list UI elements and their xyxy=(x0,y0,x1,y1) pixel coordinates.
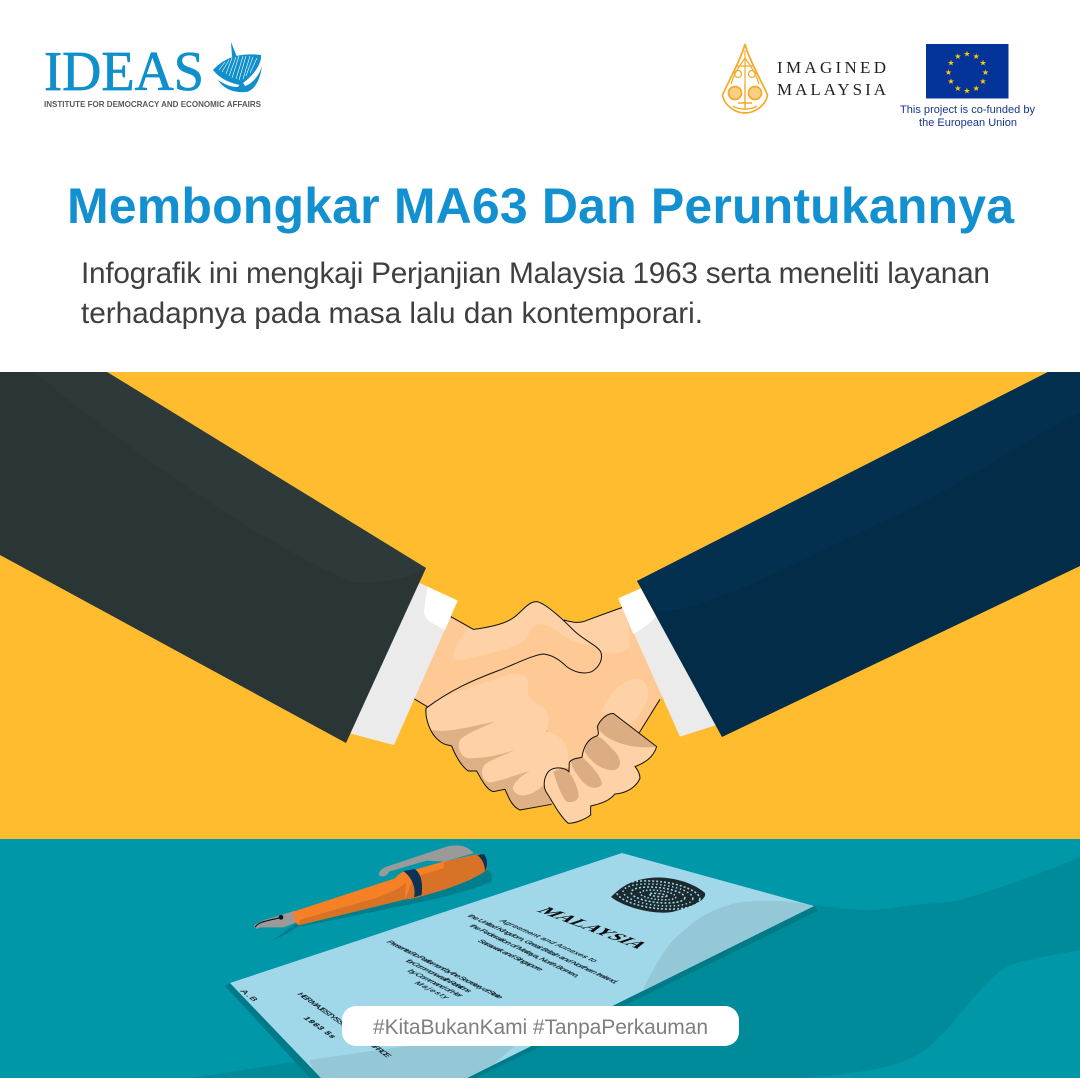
title: Membongkar MA63 Dan Peruntukannya xyxy=(67,178,1015,234)
logo: Imagined Malaysia xyxy=(722,44,887,113)
document body text: the Federation of Malaya, North Borneo, xyxy=(467,924,583,978)
EU flag: ★ xyxy=(973,52,980,61)
back hand and forearms xyxy=(403,602,668,770)
document body text: 1963 5s xyxy=(301,1016,339,1039)
logo wordmark line 2: MALAYSIA xyxy=(777,80,887,99)
subtitle: Infografik ini mengkaji Perjanjian Malaysia 1963 serta meneliti layanan xyxy=(81,257,990,290)
fist shadow xyxy=(426,708,568,810)
document body text: Sarawak and Singapore xyxy=(475,939,547,972)
pen barrel lower shade xyxy=(299,882,406,925)
document body text: A.B xyxy=(238,989,261,1002)
EU flag: ★ xyxy=(947,59,955,68)
document body text: for Commonwealth Relations xyxy=(403,959,474,993)
EU flag: ★ xyxy=(954,84,961,93)
front fingers xyxy=(544,713,657,823)
pen nib xyxy=(254,911,297,929)
subtitle xyxy=(81,257,990,330)
pen clip xyxy=(379,845,473,876)
EU flag: ★ xyxy=(973,84,980,93)
left shirt cuff xyxy=(343,580,458,745)
subtitle: terhadapnya pada masa lalu dan kontemporari. xyxy=(81,297,703,330)
logo wordmark line 1: IMAGINED xyxy=(777,58,886,77)
logo tagline: INSTITUTE FOR DEMOCRACY AND ECONOMIC AFFAIRS xyxy=(44,100,262,109)
panel: yellow handshake background xyxy=(0,372,1080,839)
document body text: by Command of Her xyxy=(405,969,466,998)
EU flag xyxy=(926,44,1008,98)
document shadow xyxy=(225,906,818,1078)
EU flag: ★ xyxy=(947,77,955,86)
EU flag: ★ xyxy=(954,52,961,61)
icon: IDEAS bird xyxy=(213,42,262,92)
document body text: the United Kingdom, Great Britain and Northern Ireland, xyxy=(465,914,622,984)
right suit sleeve xyxy=(637,372,1080,737)
document heading: MALAYSIA xyxy=(531,906,654,951)
fist highlight xyxy=(426,674,568,795)
finger outline xyxy=(544,713,657,823)
illustration: handshake xyxy=(403,602,668,823)
document body text: Presented to Parliament by the Secretary of State xyxy=(384,940,506,999)
panel: teal table background xyxy=(0,839,1080,1078)
pen barrel xyxy=(293,854,487,925)
logo: EU flag and co-funding note xyxy=(900,44,1036,129)
document body text: Agreement and Annexes to xyxy=(497,919,601,963)
EU flag: ★ xyxy=(979,77,987,86)
document coat of arms xyxy=(611,877,705,913)
pen bands xyxy=(403,854,487,897)
illustration: document xyxy=(225,853,820,1080)
EU flag: ★ xyxy=(963,86,971,96)
icon: wayang leaf emblem xyxy=(722,44,768,113)
table shading wave xyxy=(190,857,1080,1078)
skin highlight: lower right xyxy=(602,678,648,727)
hashtags: #KitaBukanKami #TanpaPerkauman xyxy=(373,1016,708,1039)
document body text: HER MAJESTY'S STATIONERY OFFICE xyxy=(295,992,393,1058)
finger shading xyxy=(553,713,656,802)
illustration: fountain pen xyxy=(254,845,492,939)
document body text xyxy=(238,914,622,1058)
co-funding note: This project is co-funded by xyxy=(900,104,1036,116)
co-funding note line 2: the European Union xyxy=(919,117,1017,129)
document page xyxy=(230,853,814,1078)
document shaded areas xyxy=(309,901,820,1080)
document body text: Majesty xyxy=(412,981,452,999)
logo: IDEAS xyxy=(44,41,262,109)
hashtag pill xyxy=(342,1006,739,1046)
thumb highlight xyxy=(453,602,600,660)
EU flag: ★ xyxy=(979,59,987,68)
right shirt cuff xyxy=(618,585,722,737)
left suit sleeve xyxy=(0,372,426,743)
hand outlines xyxy=(412,602,660,810)
EU flag: ★ xyxy=(963,50,971,58)
pen shadow xyxy=(273,868,492,939)
skin highlight: right back of hand xyxy=(564,607,630,654)
pen cap shade xyxy=(405,854,487,899)
EU flag: ★ xyxy=(945,68,952,77)
EU flag: ★ xyxy=(982,68,989,77)
logo wordmark: IDEAS xyxy=(44,41,204,103)
